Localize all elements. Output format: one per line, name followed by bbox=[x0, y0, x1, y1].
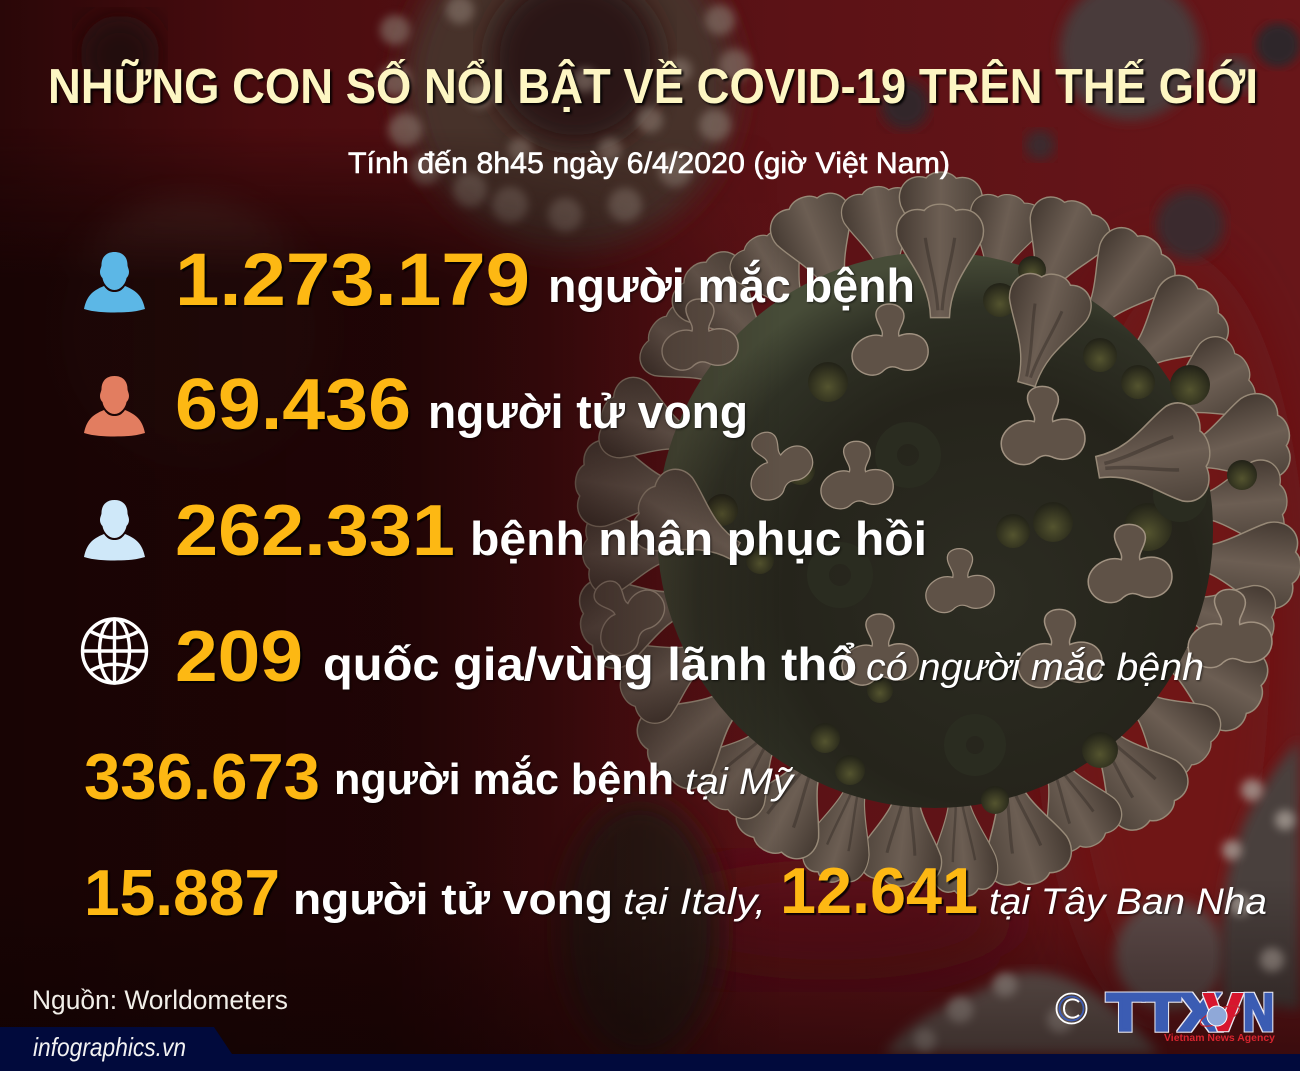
receptor rings bbox=[818, 433, 1196, 765]
stat row: US cases bbox=[84, 740, 796, 813]
icon: red person bbox=[84, 376, 145, 436]
illustration: main coronavirus bbox=[569, 171, 1300, 899]
stat row: Italy and Spain deaths: người tử vong bbox=[293, 875, 613, 924]
logo: TTXVN bbox=[1107, 984, 1275, 1044]
footer bar bbox=[0, 1027, 1300, 1071]
stat row: recovered: bệnh nhân phục hồi bbox=[470, 512, 927, 565]
stat row: recovered bbox=[84, 491, 927, 571]
source: Nguồn: Worldometers bbox=[32, 985, 288, 1015]
icon: pale person bbox=[84, 500, 145, 560]
stat row: US cases: người mắc bệnh bbox=[334, 754, 674, 804]
surface spikes bbox=[571, 204, 1272, 688]
blurred bottom shapes bbox=[560, 800, 720, 1060]
stat row: Italy and Spain deaths bbox=[84, 854, 1267, 929]
subtitle: Tính đến 8h45 ngày 6/4/2020 (giờ Việt Nam) bbox=[348, 147, 950, 180]
stat row: countries: quốc gia/vùng lãnh thổ bbox=[323, 638, 857, 690]
stat row: Italy and Spain deaths: 12.641 bbox=[780, 854, 978, 927]
icon: globe bbox=[82, 619, 146, 683]
stat row: cases: 1.273.179 bbox=[175, 238, 530, 321]
surface balls bbox=[706, 256, 1257, 814]
stat row: countries: 209 bbox=[175, 617, 303, 697]
logo: TTXVN: V bbox=[1204, 984, 1242, 1042]
stat row: US cases: tại Mỹ bbox=[685, 761, 796, 802]
stat row: deaths: người tử vong bbox=[428, 385, 748, 438]
logo: TTXVN: TTX bbox=[1107, 984, 1220, 1042]
stat row: cases bbox=[84, 238, 915, 321]
logo: TTXVN: Vietnam News Agency bbox=[1164, 1032, 1275, 1044]
stat row: countries bbox=[82, 617, 1204, 697]
rear spikes bbox=[569, 171, 1300, 899]
stat row: US cases: 336.673 bbox=[84, 740, 320, 813]
overlay: dark left shading bbox=[0, 150, 750, 1054]
stat row: countries: có người mắc bệnh bbox=[866, 646, 1204, 689]
stat row: deaths bbox=[84, 365, 748, 445]
logo: TTXVN: N bbox=[1243, 984, 1274, 1042]
stat row: Italy and Spain deaths: tại Tây Ban Nha bbox=[989, 881, 1267, 922]
blurred spheres top right bbox=[1060, 0, 1200, 120]
stat row: deaths: 69.436 bbox=[175, 365, 411, 445]
copyright symbol bbox=[1056, 994, 1086, 1024]
faint left virus bbox=[60, 200, 320, 460]
stat row: recovered: 262.331 bbox=[175, 491, 455, 571]
blurred virus top center bbox=[405, 0, 735, 250]
sphere body bbox=[657, 252, 1213, 808]
stat row: Italy and Spain deaths: 15.887 bbox=[84, 856, 280, 929]
stat row: cases: người mắc bệnh bbox=[548, 259, 915, 312]
icon: blue person bbox=[84, 252, 145, 312]
stat row: Italy and Spain deaths: tại Italy, bbox=[623, 881, 766, 922]
site name: infographics.vn bbox=[33, 1032, 186, 1062]
